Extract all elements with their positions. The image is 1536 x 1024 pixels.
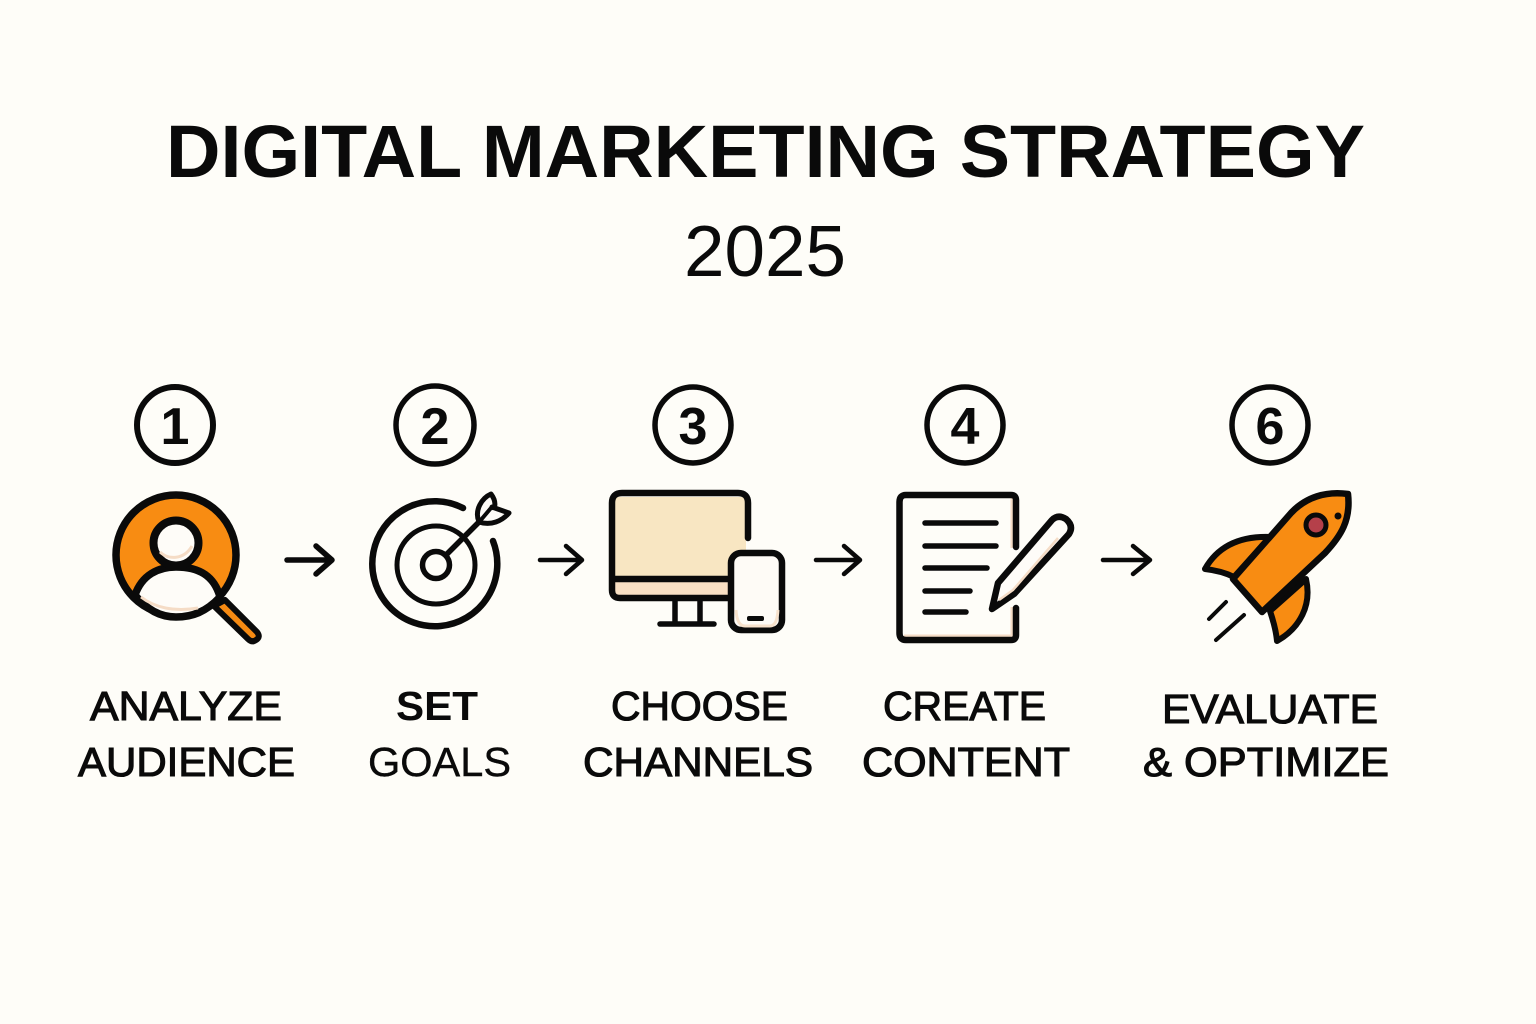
icon: audience magnifier xyxy=(116,495,259,641)
step 4: create content xyxy=(862,387,1071,785)
icon: monitor and phone xyxy=(612,493,782,630)
label: evaluate and optimize: & OPTIMIZE xyxy=(1143,739,1389,785)
step 3: choose channels xyxy=(583,387,813,785)
label: create content: CREATE xyxy=(883,683,1046,729)
arrow 3 to 4 xyxy=(816,546,860,574)
label: analyze audience: AUDIENCE xyxy=(78,739,295,785)
number badge 6: 6 xyxy=(1256,398,1284,456)
label: analyze audience: ANALYZE xyxy=(90,683,282,729)
step 6: evaluate and optimize xyxy=(1143,387,1389,785)
icon: rocket xyxy=(1205,493,1349,641)
number badge 3: 3 xyxy=(679,398,707,456)
number badge 1: 1 xyxy=(161,398,189,456)
number badge 4: 4 xyxy=(951,398,980,456)
label: choose channels: CHOOSE xyxy=(611,683,788,729)
label: choose channels: CHANNELS xyxy=(583,739,813,785)
icon: target with dart xyxy=(372,494,509,626)
step 1: analyze audience xyxy=(78,387,295,785)
label: set goals: SET xyxy=(396,683,478,729)
label: create content xyxy=(862,683,1070,785)
arrow 4 to 6 xyxy=(1103,546,1150,574)
number badge 2: 2 xyxy=(421,398,449,456)
label: evaluate and optimize xyxy=(1143,686,1389,785)
title: DIGITAL MARKETING STRATEGY xyxy=(166,110,1365,193)
label: set goals xyxy=(368,683,511,785)
number badge 4 xyxy=(927,387,1003,463)
number badge 1 xyxy=(137,387,213,463)
icon: document and pencil xyxy=(900,495,1071,640)
number badge 2 xyxy=(396,386,474,464)
label: analyze audience xyxy=(78,683,295,785)
arrow 1 to 2 xyxy=(287,546,332,574)
label: choose channels xyxy=(583,683,813,785)
label: set goals: GOALS xyxy=(368,739,511,785)
step 2: set goals xyxy=(368,386,511,785)
label: create content: CONTENT xyxy=(862,739,1070,785)
subtitle: year: 2025 xyxy=(684,212,846,292)
label: evaluate and optimize: EVALUATE xyxy=(1162,686,1378,732)
arrow 2 to 3 xyxy=(540,546,582,574)
number badge 6 xyxy=(1232,387,1308,463)
number badge 3 xyxy=(655,387,731,463)
